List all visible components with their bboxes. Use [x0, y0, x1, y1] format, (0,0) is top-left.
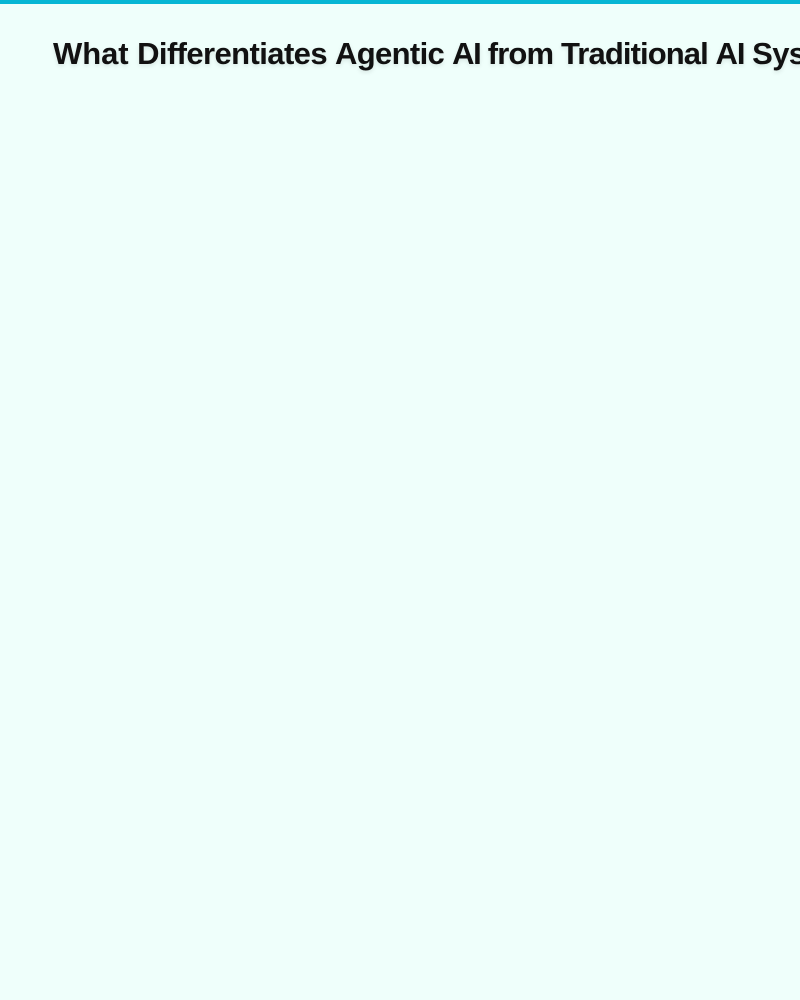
top accent bar — [0, 0, 800, 4]
